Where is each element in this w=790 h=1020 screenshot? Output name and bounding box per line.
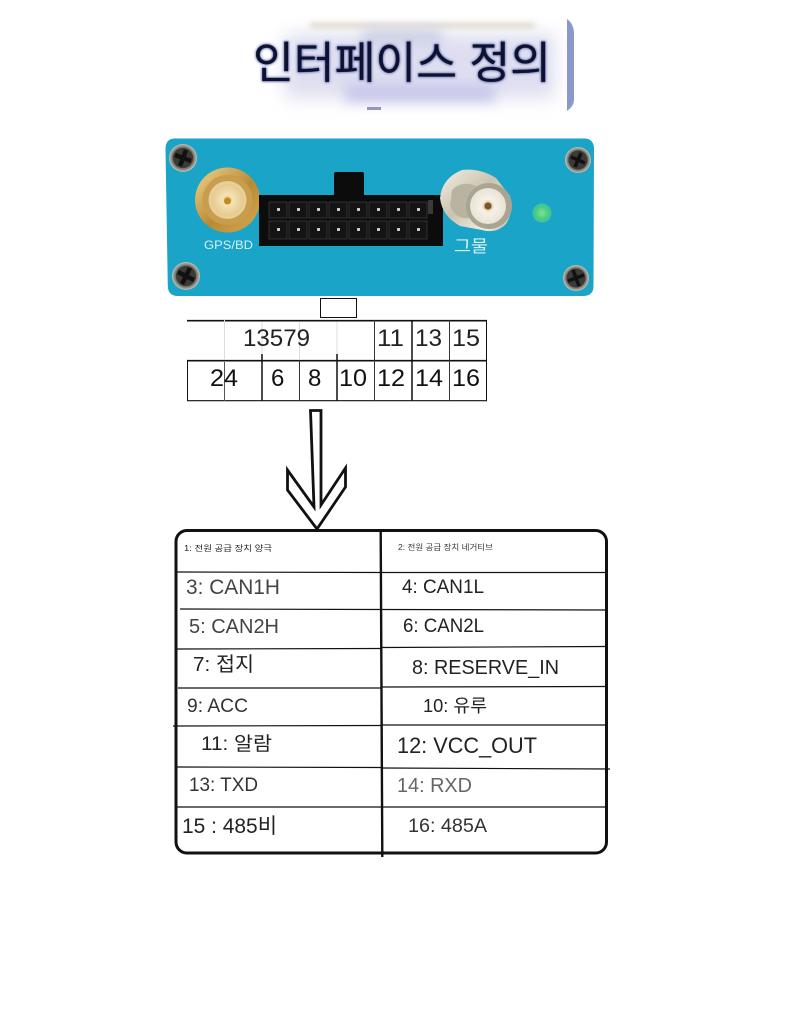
right column: even pins: 6: CAN2L	[403, 616, 484, 637]
odd pin numbers: 13579	[243, 325, 310, 352]
device front panel	[166, 138, 594, 296]
pin definition table	[173, 530, 610, 857]
label: network: 그물	[454, 237, 488, 256]
right column: even pins	[397, 542, 559, 837]
icon: green LED	[532, 204, 552, 222]
right column: even pins: 16: 485A	[408, 816, 487, 837]
even pin numbers: 10	[339, 365, 367, 392]
even pin numbers: 6	[271, 365, 284, 392]
left column: odd pins: 15 : 485비	[182, 815, 277, 838]
left column: odd pins	[182, 543, 280, 838]
even pin numbers: 24	[210, 365, 238, 392]
odd pin numbers: 15	[452, 325, 480, 352]
left column: odd pins: 3: CAN1H	[186, 576, 280, 599]
left column: odd pins: 1: 전원 공급 장치 양극	[184, 543, 272, 553]
left column: odd pins: 7: 접지	[193, 653, 254, 676]
right column: even pins: 8: RESERVE_IN	[412, 657, 559, 679]
title text: 인터페이스 정의	[253, 39, 551, 88]
odd pin numbers: 11	[377, 325, 404, 352]
icon: network antenna connector	[440, 170, 512, 231]
right column: even pins: 2: 전원 공급 장치 네거티브	[398, 542, 493, 552]
title banner	[253, 19, 574, 111]
odd pin numbers: 13	[415, 325, 442, 352]
icon: panel screws	[169, 144, 591, 291]
even pin numbers: 14	[415, 365, 443, 392]
left column: odd pins: 13: TXD	[189, 775, 258, 796]
arrow: pins to definitions	[288, 410, 346, 529]
even pin numbers: 8	[308, 365, 321, 392]
even pin numbers: 16	[452, 365, 480, 392]
left column: odd pins: 11: 알람	[201, 733, 272, 755]
icon: 16-pin connector	[259, 172, 443, 246]
label: GPS/BD: GPS/BD	[204, 238, 253, 252]
even pin numbers	[210, 365, 480, 392]
right column: even pins: 14: RXD	[397, 775, 472, 797]
pin number table	[187, 320, 487, 401]
right column: even pins: 4: CAN1L	[402, 577, 484, 598]
icon: GPS antenna connector	[195, 168, 260, 232]
right column: even pins: 12: VCC_OUT	[397, 733, 537, 758]
odd pin numbers	[243, 325, 480, 352]
even pin numbers: 12	[377, 365, 405, 392]
left column: odd pins: 5: CAN2H	[189, 616, 279, 638]
connector key outline	[320, 298, 356, 318]
title shadow: 인터페이스 정의	[253, 39, 551, 88]
left column: odd pins: 9: ACC	[187, 696, 248, 717]
right column: even pins: 10: 유루	[423, 696, 487, 716]
